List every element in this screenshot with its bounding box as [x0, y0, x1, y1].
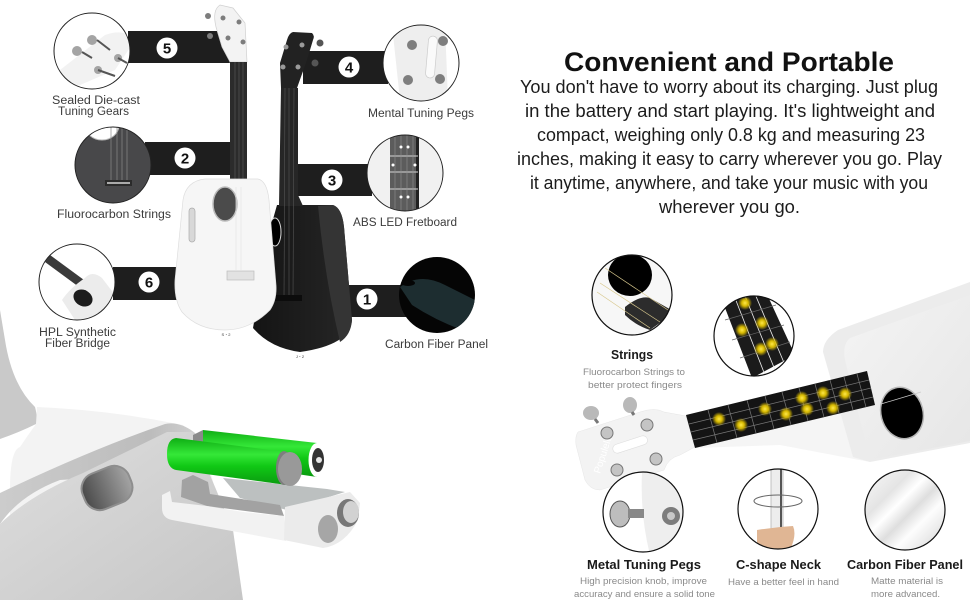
label: metal tuning pegs	[574, 557, 715, 600]
headstock	[576, 410, 695, 490]
label: HPL synthetic fiber bridge: Fiber Bridge	[45, 338, 110, 350]
description text: in the battery and start playing. It's lightweight and	[525, 101, 935, 121]
label: sealed die-cast tuning gears: Sealed Die-cast	[52, 95, 141, 107]
title: Convenient and Portable	[564, 47, 894, 77]
ukulele shoulder band	[0, 423, 215, 524]
ukulele body	[823, 282, 970, 462]
holder gray interior	[181, 475, 284, 516]
label: metal tuning pegs: accuracy and ensure a solid tone	[574, 589, 715, 600]
label: sealed die-cast tuning gears: Tuning Gears	[58, 106, 129, 118]
callout bar 6: 6	[145, 274, 153, 292]
white ukulele body	[175, 179, 276, 330]
description text: it anytime, anywhere, and take your music with you	[530, 173, 928, 193]
label: carbon fiber panel, matte: Matte material is	[871, 576, 943, 587]
description text: You don't have to worry about its charging. Just plug	[520, 77, 938, 97]
ukulele top surface	[10, 407, 243, 600]
callout bar 3	[296, 164, 372, 196]
back green battery	[193, 430, 326, 477]
description text: inches, making it easy to carry wherever you go. Play	[517, 149, 942, 169]
label: fluorocarbon strings: Fluorocarbon Strings	[57, 209, 171, 221]
label: strings: Fluorocarbon Strings to	[583, 367, 685, 378]
detail circle: LED fretboard	[367, 134, 443, 212]
detail circle: tuning gears	[54, 13, 135, 90]
detail circle: strings	[74, 126, 150, 204]
holder end button	[337, 499, 359, 527]
black ukulele headstock	[280, 32, 314, 88]
callout bar 4: 4	[345, 60, 354, 76]
detail circle: bridge	[39, 244, 115, 320]
label: strings: Strings	[611, 347, 653, 362]
label: C-shape neck: C-shape Neck	[736, 557, 822, 572]
front green battery	[167, 438, 302, 486]
holder white half cylinder	[162, 491, 286, 541]
callout bar 1	[348, 285, 408, 317]
label: carbon fiber panel, matte	[847, 557, 963, 600]
white ukulele headstock	[215, 5, 247, 62]
holder end cap	[284, 492, 360, 548]
white ukulele pegs	[205, 13, 246, 44]
battery holder	[162, 475, 360, 548]
tuning pegs	[583, 397, 662, 476]
callout bar 5	[128, 31, 230, 63]
detail circle: strings at sound hole	[592, 254, 675, 335]
label: carbon fiber panel, matte: more advanced.	[871, 589, 940, 600]
detail circle: carbon fiber texture	[865, 470, 945, 550]
label: metal tuning pegs: Metal Tuning Pegs	[587, 557, 701, 572]
ukulele neck base, grey	[0, 310, 37, 439]
LED fretboard	[686, 371, 875, 448]
black ukulele	[253, 32, 352, 359]
label: mental tuning pegs: Mental Tuning Pegs	[368, 108, 474, 120]
black ukulele sound hole	[269, 218, 281, 246]
neck shadow	[695, 405, 870, 462]
panel: battery illustration	[0, 310, 360, 600]
label: ABS LED fretboard: ABS LED Fretboard	[353, 217, 457, 229]
headstock brand: Populele	[592, 434, 615, 475]
label: strings	[583, 347, 685, 391]
holder switch button	[318, 515, 338, 543]
label: HPL synthetic fiber bridge	[39, 327, 116, 350]
callout bar 3: 3	[328, 172, 336, 190]
label: carbon fiber panel: Carbon Fiber Panel	[385, 339, 488, 351]
description text	[517, 77, 942, 217]
label: C-shape neck	[728, 557, 839, 588]
black ukulele neck	[279, 88, 303, 206]
white ukulele	[175, 5, 276, 337]
detail circle: glowing frets	[714, 290, 795, 378]
horizontal ukulele	[576, 282, 970, 490]
callout bar 6	[113, 267, 179, 300]
black ukulele pegs	[280, 42, 304, 70]
label: C-shape neck: Have a better feel in hand	[728, 577, 839, 588]
sound hole	[875, 382, 929, 444]
detail circle: C-shape neck	[738, 468, 818, 550]
callout bar 4	[303, 51, 388, 84]
callout bar 5: 5	[163, 40, 171, 58]
label: sealed die-cast tuning gears	[52, 95, 141, 118]
black ukulele: J・2	[296, 354, 305, 359]
detail circle: carbon panel	[399, 257, 475, 333]
label: carbon fiber panel, matte: Carbon Fiber Panel	[847, 557, 963, 572]
label: strings: better protect fingers	[588, 380, 682, 391]
detail circle: metal tuning peg	[603, 472, 685, 555]
callout bar 2	[145, 142, 230, 175]
body slot	[77, 461, 137, 515]
white ukulele neck	[230, 62, 247, 187]
callout bar 1: 1	[363, 292, 371, 308]
holder back strip	[223, 478, 345, 510]
callout bar 2: 2	[181, 150, 189, 168]
white ukulele: S・2	[222, 332, 231, 337]
label: HPL synthetic fiber bridge: HPL Synthetic	[39, 327, 116, 339]
description text: wherever you go.	[658, 197, 800, 217]
detail circle: tuning pegs	[383, 25, 459, 101]
ukulele body face	[0, 432, 243, 600]
label: metal tuning pegs: High precision knob, improve	[580, 576, 707, 587]
description text: compact, weighing only 0.8 kg and measuring 23	[537, 125, 925, 145]
black ukulele body	[253, 205, 352, 352]
